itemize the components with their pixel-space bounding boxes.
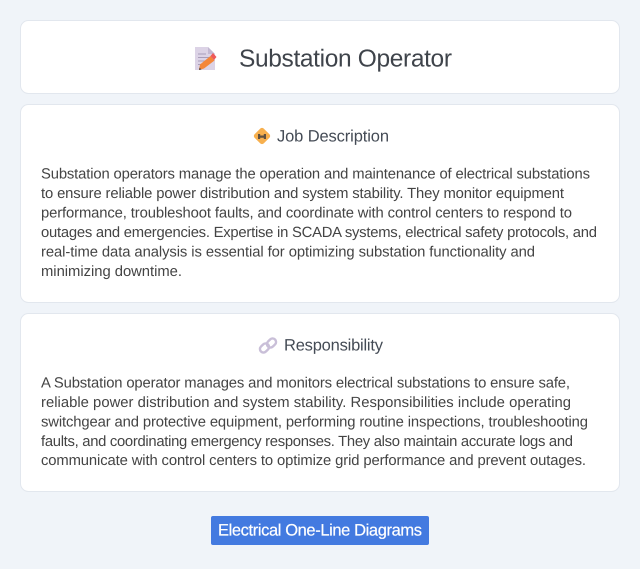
- text block: job description: real-time data analysis is essential for optimizing substation functionality and: [41, 244, 535, 260]
- text block: job description: Substation operators manage the operation and maintenance of electrical substations: [41, 166, 590, 182]
- heading: responsibility: Responsibility: [284, 336, 384, 354]
- text block: job description: outages and emergencies. Expertise in SCADA systems, electrical safety protocols, and: [41, 225, 597, 241]
- text block: job description: to ensure reliable power distribution and system stability. They monitor equipment: [41, 186, 564, 202]
- button: electrical one-line diagrams: Electrical One-Line Diagrams: [218, 522, 422, 540]
- text block: job description: [41, 166, 597, 280]
- button: electrical one-line diagrams: [211, 516, 429, 545]
- text block: responsibility: A Substation operator manages and monitors electrical substations to ensure safe,: [41, 376, 570, 392]
- panel: title card: [20, 20, 620, 94]
- text block: responsibility: [41, 376, 588, 469]
- text block: job description: performance, troubleshoot faults, and coordinate with control centers to respond to: [41, 206, 572, 222]
- text block: responsibility: switchgear and protective equipment, performing routine inspections, troubleshooting: [41, 414, 588, 430]
- title: Substation Operator: [239, 46, 452, 72]
- text block: responsibility: faults, and coordinating emergency responses. They also maintain accurate logs and: [41, 434, 573, 450]
- icon: document with pencil: [195, 47, 216, 70]
- text block: responsibility: reliable power distribution and system stability. Responsibilities include operating: [41, 395, 571, 411]
- heading: job description: Job Description: [277, 128, 389, 146]
- icon: diamond sign: [253, 127, 271, 145]
- panel: job description: [20, 104, 620, 302]
- text block: job description: minimizing downtime.: [41, 264, 182, 280]
- text block: responsibility: communicate with control centers to optimize grid performance and prevent outages.: [41, 453, 586, 469]
- panel: responsibility: [20, 314, 620, 492]
- icon: chain link: [258, 337, 278, 354]
